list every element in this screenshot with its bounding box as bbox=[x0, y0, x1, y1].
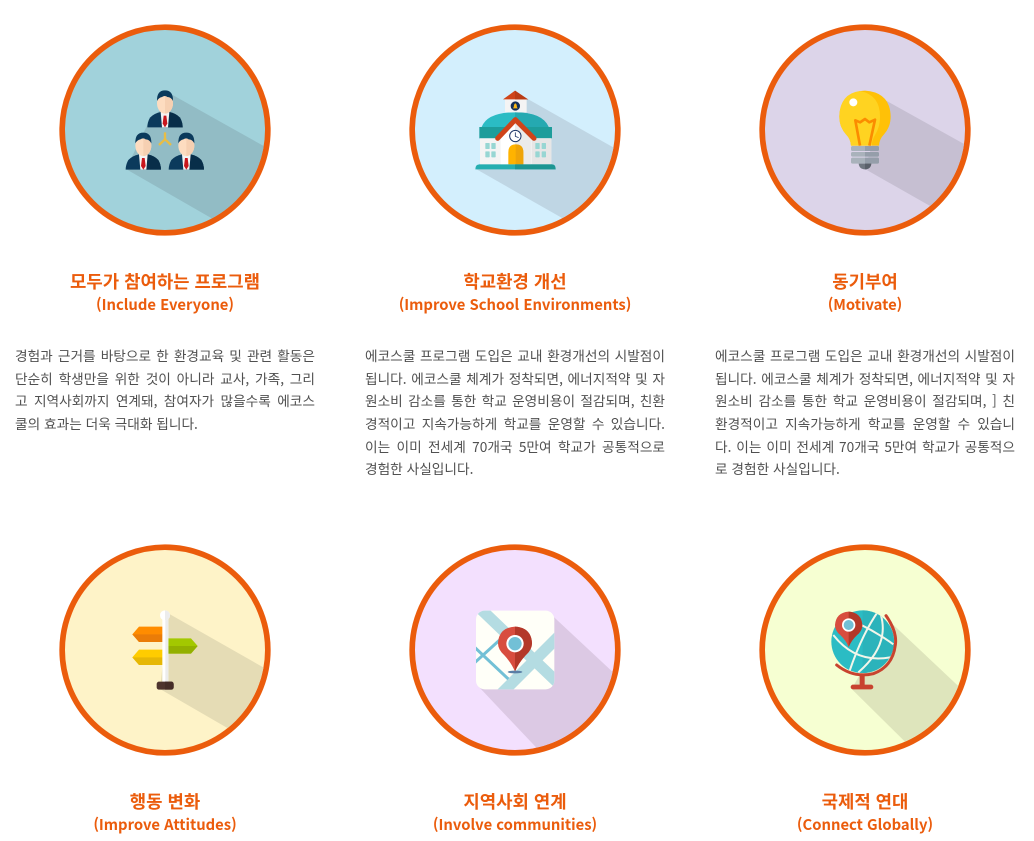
heading: connect globally bbox=[797, 788, 933, 835]
text block: include everyone: 고 지역사회까지 연계돼, 참여자가 많을수록 에코스 bbox=[15, 390, 315, 410]
panel: motivate icon bbox=[759, 24, 971, 236]
panel: involve communities icon bbox=[409, 544, 621, 756]
text block: improve school environments: 원소비 감소를 통한 학교 운영비용이 절감되며, 친환 bbox=[365, 390, 665, 410]
text block: improve school environments: 이는 이미 전세계 70개국 5만여 학교가 공통적으로 bbox=[365, 436, 665, 456]
text block: include everyone bbox=[15, 345, 315, 433]
heading: involve communities bbox=[433, 788, 597, 835]
text block: motivate: 환경적이고 지속가능하게 학교를 운영할 수 있습니 bbox=[715, 413, 1015, 433]
panel: school environment icon bbox=[409, 24, 621, 236]
heading: connect globally: (Connect Globally) bbox=[797, 814, 933, 835]
heading: motivate bbox=[828, 268, 902, 315]
heading: involve communities: (Involve communities) bbox=[433, 814, 597, 835]
heading: include everyone: (Include Everyone) bbox=[96, 294, 234, 315]
text block: include everyone: 단순히 학생만을 위한 것이 아니라 교사, 가족, 그리 bbox=[15, 368, 315, 388]
text block: motivate: 에코스쿨 프로그램 도입은 교내 환경개선의 시발점이 bbox=[715, 345, 1015, 365]
heading: improve attitudes bbox=[93, 788, 237, 835]
heading: improve school environments bbox=[399, 268, 631, 315]
text block: improve school environments: 됩니다. 에코스쿨 체계가 정착되면, 에너지적약 및 자 bbox=[365, 368, 665, 388]
text block: improve school environments: 경적이고 지속가능하게 학교를 운영할 수 있습니다. bbox=[365, 413, 665, 433]
heading: connect globally: 국제적 연대 bbox=[822, 788, 908, 814]
heading: improve school environments: (Improve School Environments) bbox=[399, 294, 631, 315]
heading: include everyone: 모두가 참여하는 프로그램 bbox=[70, 268, 260, 294]
panel: include everyone icon bbox=[59, 24, 271, 236]
text block: improve school environments: 에코스쿨 프로그램 도입은 교내 환경개선의 시발점이 bbox=[365, 345, 665, 365]
heading: improve attitudes: (Improve Attitudes) bbox=[93, 814, 237, 835]
heading: include everyone bbox=[70, 268, 260, 315]
text block: include everyone: 쿨의 효과는 더욱 극대화 됩니다. bbox=[15, 413, 198, 433]
text block: motivate: 원소비 감소를 통한 학교 운영비용이 절감되며, ] 친 bbox=[715, 390, 1015, 410]
heading: improve school environments: 학교환경 개선 bbox=[463, 268, 567, 294]
text block: motivate: 됩니다. 에코스쿨 체계가 정착되면, 에너지적약 및 자 bbox=[715, 368, 1015, 388]
heading: improve attitudes: 행동 변화 bbox=[130, 788, 200, 814]
text block: improve school environments bbox=[365, 345, 665, 478]
text block: include everyone: 경험과 근거를 바탕으로 한 환경교육 및 관련 활동은 bbox=[15, 345, 315, 365]
heading: motivate: 동기부여 bbox=[832, 268, 898, 294]
text block: motivate: 로 경험한 사실입니다. bbox=[715, 458, 840, 478]
heading: motivate: (Motivate) bbox=[828, 294, 902, 315]
text block: improve school environments: 경험한 사실입니다. bbox=[365, 458, 473, 478]
panel: connect globally icon bbox=[759, 544, 971, 756]
panel: improve attitudes icon bbox=[59, 544, 271, 756]
text block: motivate bbox=[715, 345, 1015, 478]
heading: involve communities: 지역사회 연계 bbox=[463, 788, 567, 814]
text block: motivate: 다. 이는 이미 전세계 70개국 5만여 학교가 공통적으 bbox=[715, 436, 1015, 456]
